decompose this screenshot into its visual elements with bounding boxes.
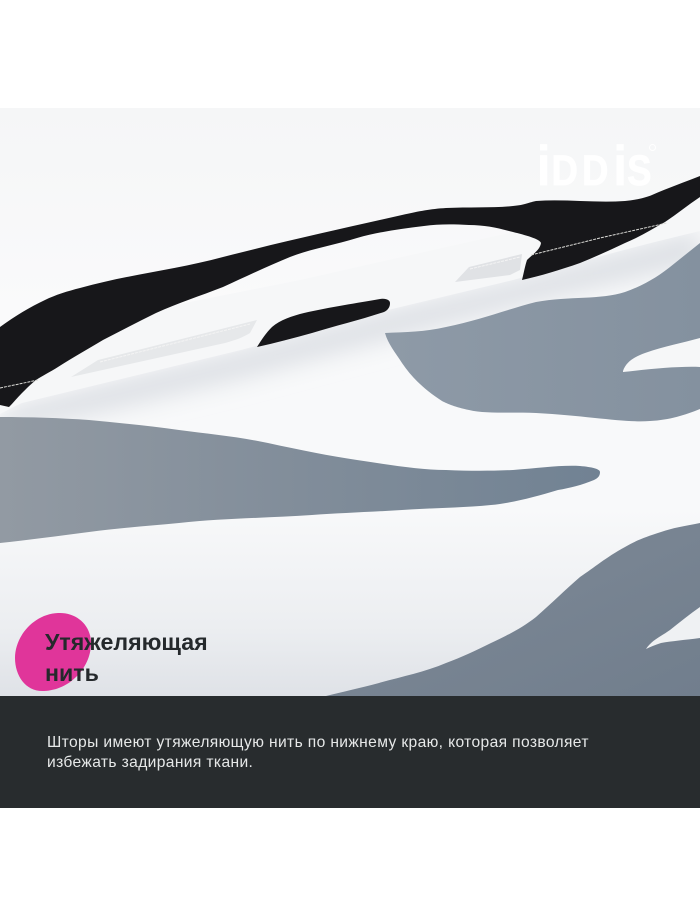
white cutout in lower stripe: [646, 607, 700, 649]
zebra stripe: grey lower right: [326, 523, 700, 696]
logo: registered mark: [650, 144, 656, 150]
white hem flap: [0, 196, 700, 414]
caption text: [47, 734, 589, 770]
small black stripe on hem: [257, 299, 390, 347]
logo: iddis: D: [551, 147, 578, 195]
zebra stripe: grey middle: [0, 417, 600, 543]
stitched patch right: [455, 254, 522, 282]
stitched patch left: [71, 320, 257, 377]
logo: iddis: S: [627, 147, 651, 195]
logo: iddis: i: [614, 135, 627, 198]
caption text: Шторы имеют утяжеляющую нить по нижнему краю, которая позволяет: [47, 734, 589, 751]
caption text: избежать задирания ткани.: [47, 754, 253, 770]
background: lower curtain layer: [0, 230, 700, 696]
heading: Утяжеляющая: [45, 629, 208, 655]
background: curtain fabric: [0, 108, 700, 696]
logo: iddis: i: [537, 135, 550, 198]
shadow under hem: [0, 231, 700, 432]
seam stitches: [0, 223, 667, 388]
heading: нить: [45, 660, 99, 686]
zebra stripe: grey upper right: [385, 243, 700, 421]
heading: [45, 629, 208, 686]
white cutout in grey stripe: [623, 338, 700, 372]
dark caption band: [0, 696, 700, 808]
logo: iddis: [537, 135, 656, 198]
logo: iddis: D: [582, 147, 608, 195]
black stripe on hem: [0, 176, 700, 407]
